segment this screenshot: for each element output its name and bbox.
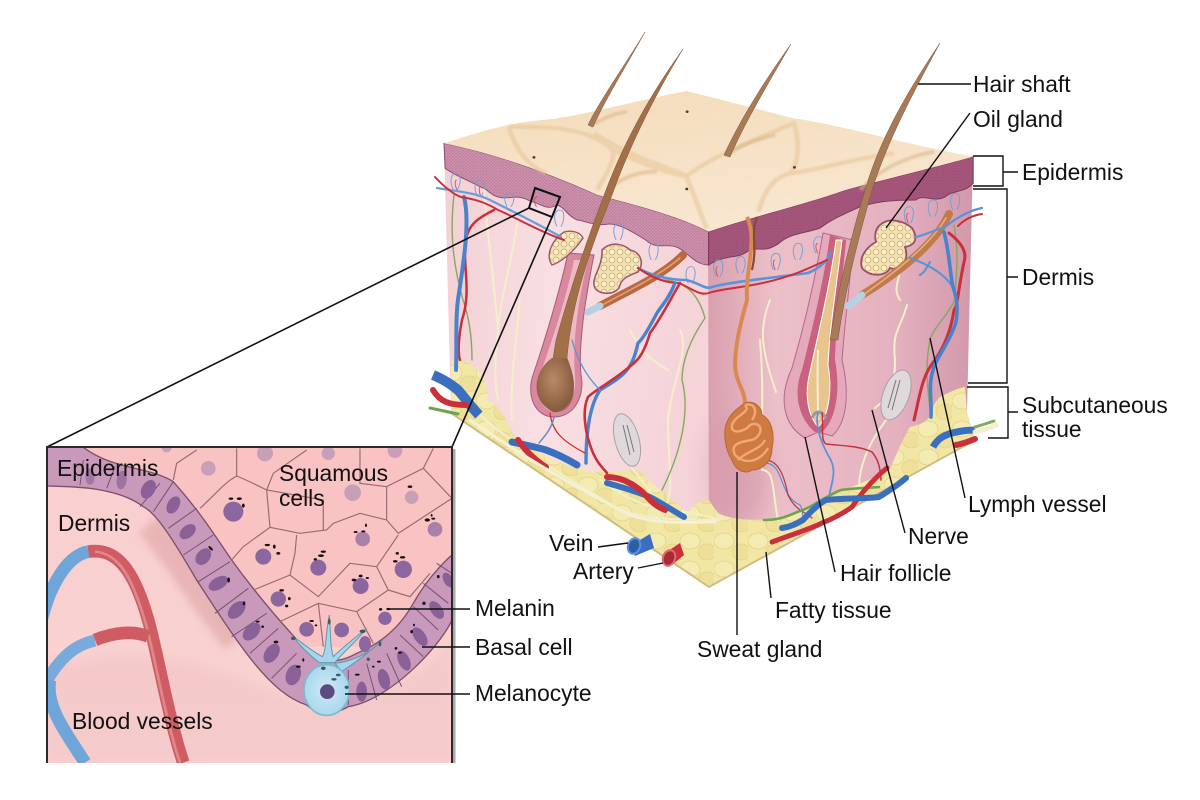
label: epidermis: Epidermis <box>1022 159 1123 185</box>
squamous nuclei <box>223 502 442 652</box>
hair bulb <box>536 358 574 412</box>
label: lymph vessel: Lymph vessel <box>968 491 1107 517</box>
label: squamous cells: cells <box>279 485 325 511</box>
cross-section artery <box>661 543 684 568</box>
skin block illustration <box>47 32 996 587</box>
skin surface <box>444 91 973 232</box>
label: nerve: Nerve <box>908 523 969 549</box>
right face lower shading <box>708 415 772 525</box>
fat edge <box>451 413 975 587</box>
label: melanocyte: Melanocyte <box>475 680 592 706</box>
hair follicle left <box>531 253 594 417</box>
sweat gland <box>725 217 773 472</box>
inset border <box>47 447 452 763</box>
right face dermis <box>708 157 975 587</box>
arrector pili muscles <box>588 214 949 312</box>
epidermis band right <box>709 157 973 265</box>
label: sweat gland: Sweat gland <box>697 636 822 662</box>
label: fatty tissue: Fatty tissue <box>775 597 892 623</box>
label: hair shaft: Hair shaft <box>973 71 1071 97</box>
label: dermis: Dermis <box>1022 264 1094 290</box>
zoom lines <box>47 208 552 447</box>
Pacinian corpuscles <box>608 366 917 469</box>
hair shafts <box>538 32 940 412</box>
dermis shadow <box>150 523 237 640</box>
melanin granules <box>208 485 440 676</box>
basal nuclei <box>85 469 456 702</box>
pale squamous nuclei <box>162 442 418 504</box>
label: inset epidermis: Epidermis <box>57 455 158 481</box>
label: subcutaneous tissue: Subcutaneous <box>1022 392 1168 418</box>
oil glands <box>549 220 915 293</box>
label: oil gland: Oil gland <box>973 106 1063 132</box>
label: subcutaneous tissue: tissue <box>1022 416 1082 442</box>
label: hair follicle: Hair follicle <box>840 560 951 586</box>
label: artery: Artery <box>573 558 634 584</box>
melanocyte <box>291 615 383 715</box>
epidermis band left <box>444 143 709 265</box>
label: vein: Vein <box>549 530 593 556</box>
leader lines and brackets <box>345 84 1018 694</box>
basal cell band <box>47 447 452 714</box>
label: blood vessels: Blood vessels <box>72 708 213 734</box>
label: squamous cells: Squamous <box>279 460 388 486</box>
blood vessels <box>430 177 996 542</box>
label: inset dermis: Dermis <box>58 510 130 536</box>
squamous cell region <box>86 448 451 646</box>
dermis lower tissue <box>47 640 452 763</box>
subcutaneous fat layer <box>451 360 975 587</box>
cross-section vein <box>626 534 654 556</box>
nerves <box>452 190 957 520</box>
inset shadow <box>453 449 456 763</box>
panel: magnified inset <box>40 442 456 763</box>
hair follicle right <box>784 233 853 438</box>
magnifier square <box>529 188 560 217</box>
label: melanin: Melanin <box>475 595 555 621</box>
cell membranes <box>173 448 452 647</box>
label: basal cell: Basal cell <box>475 634 573 660</box>
blood vessels inset <box>40 551 183 763</box>
labels <box>57 71 1168 734</box>
left face dermis <box>444 143 709 587</box>
capillary loops <box>451 173 960 283</box>
